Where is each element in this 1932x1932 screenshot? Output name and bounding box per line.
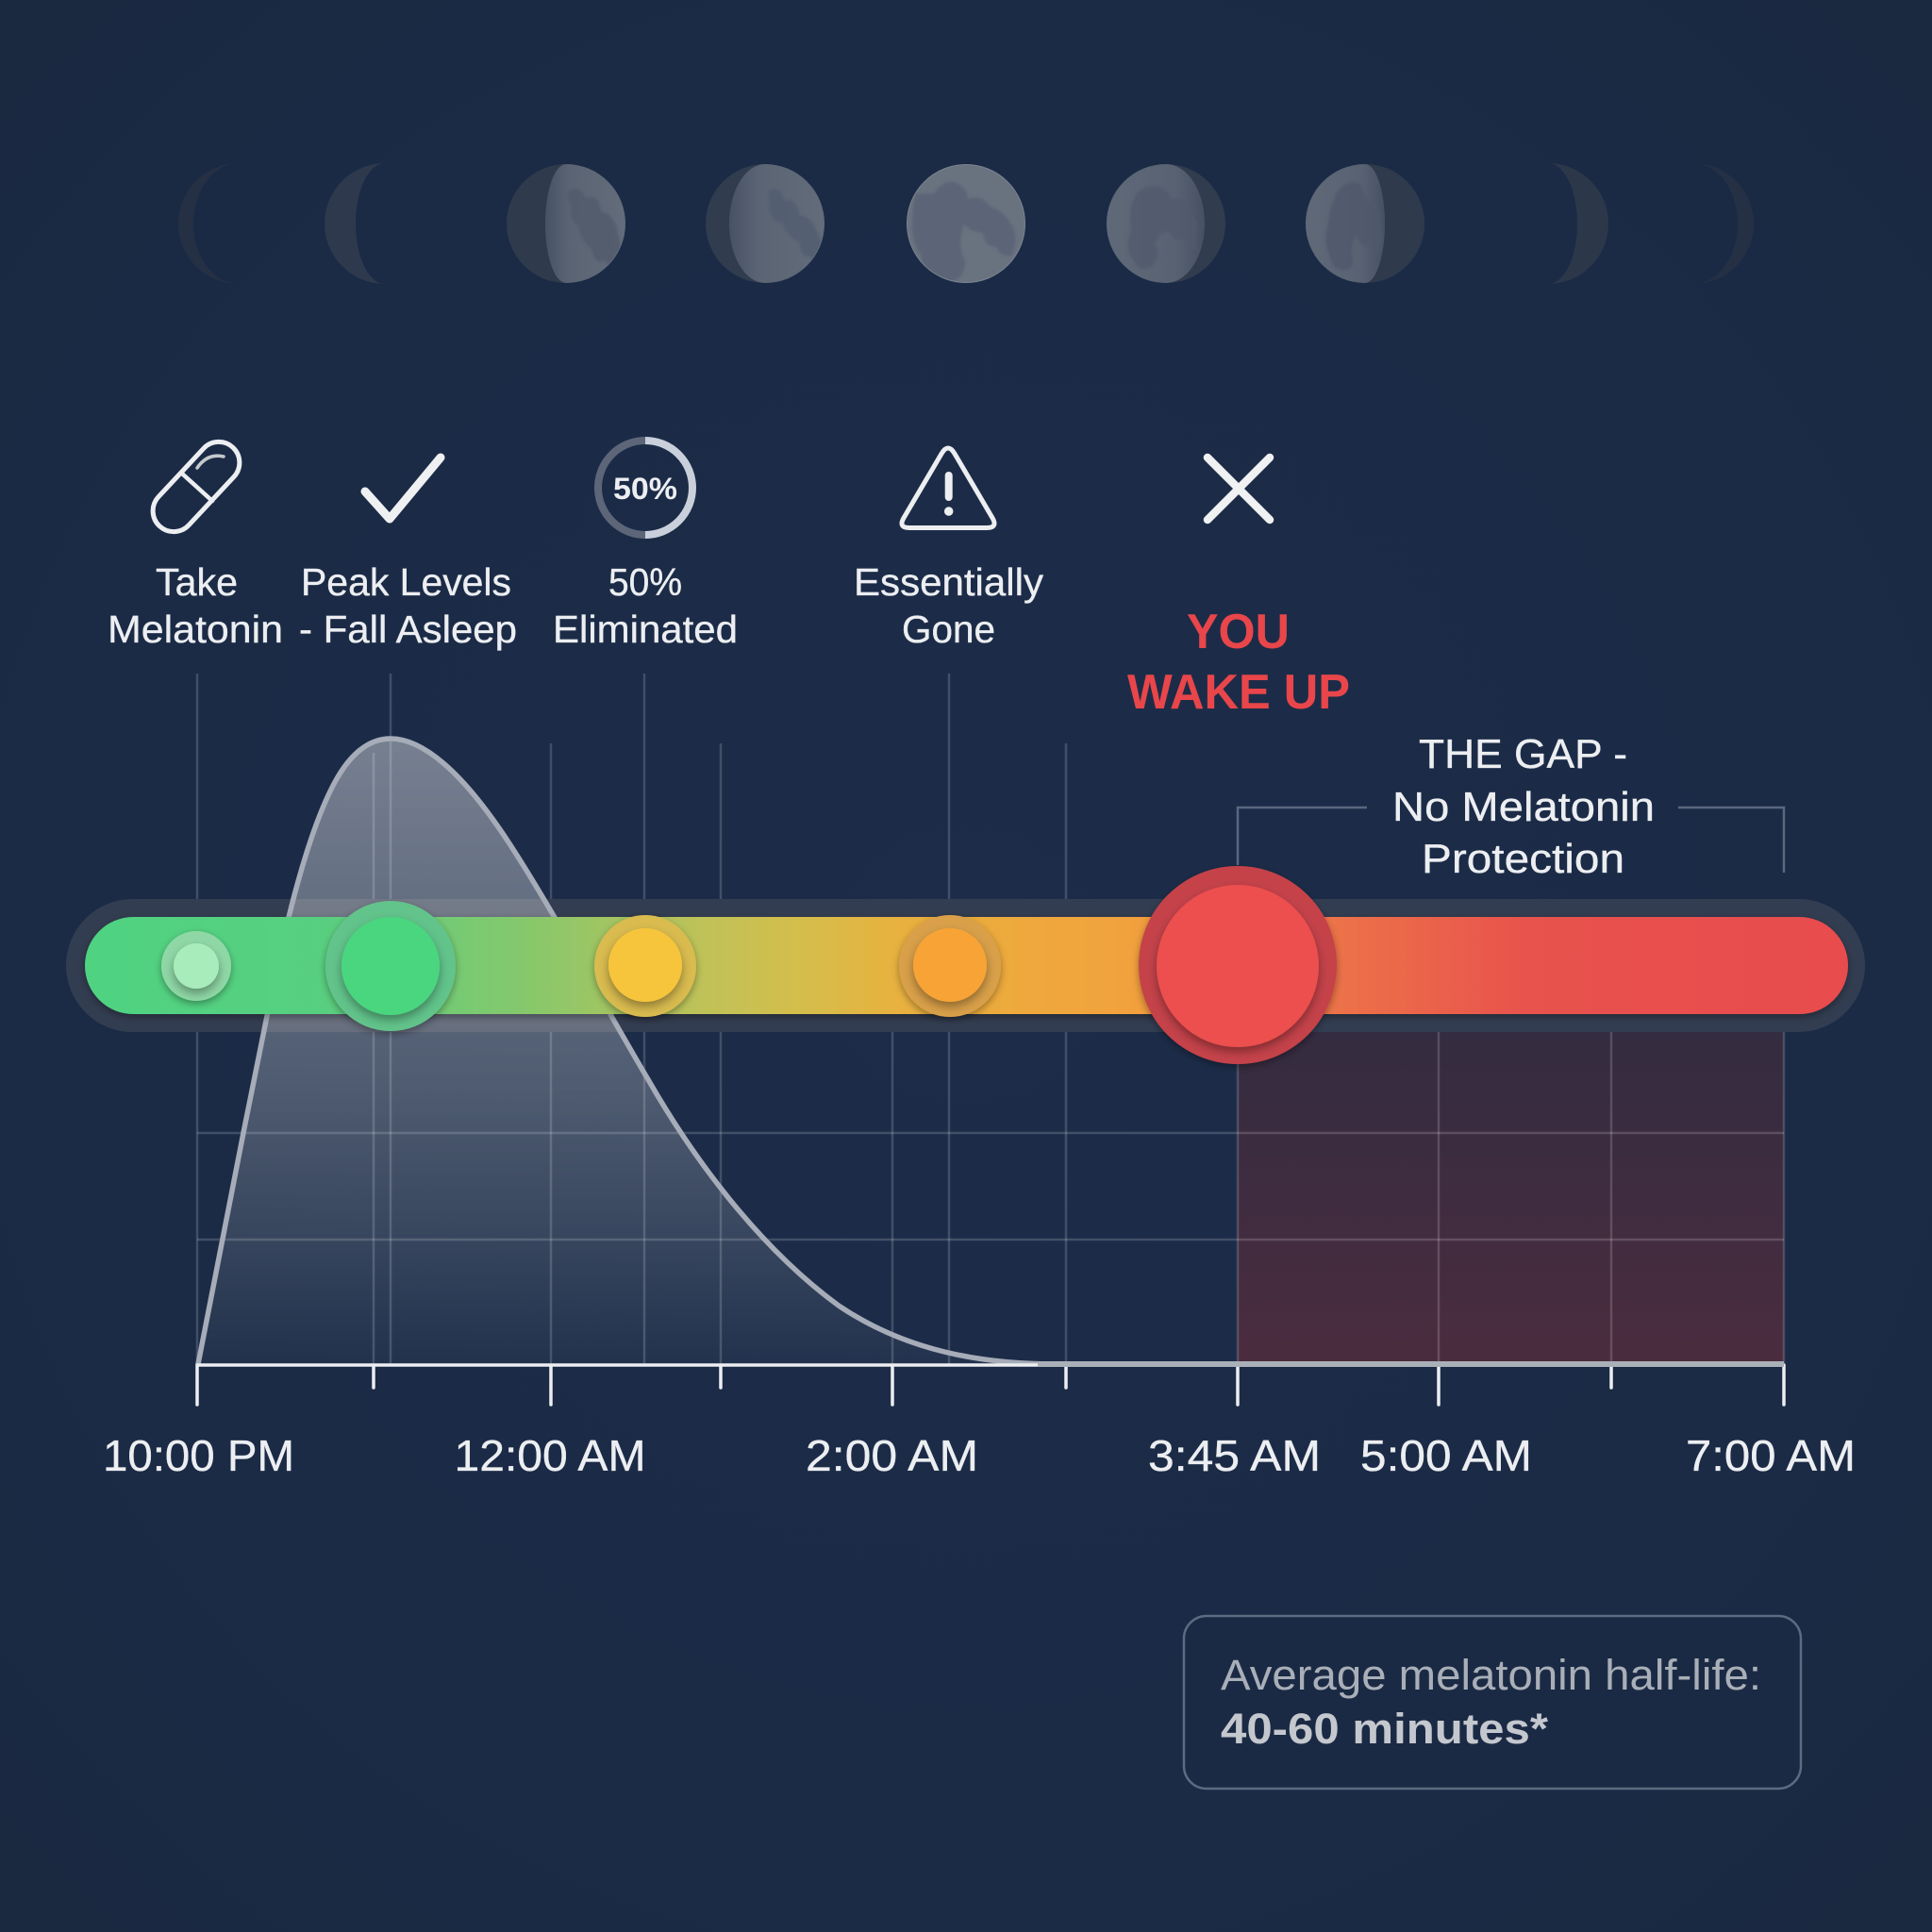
label: the gap: THE GAP - <box>1419 731 1627 777</box>
label: peak levels <box>299 560 517 651</box>
label: 50% eliminated: Eliminated <box>553 608 738 651</box>
label: take melatonin <box>108 560 283 651</box>
label: essentially gone: Gone <box>902 608 995 651</box>
time labels: 2:00 AM <box>806 1431 978 1480</box>
icon: 50% ring <box>598 441 692 535</box>
time labels: 7:00 AM <box>1686 1431 1856 1480</box>
chart grid lines <box>197 674 1784 1364</box>
label: 50% eliminated <box>553 560 738 651</box>
time labels <box>103 1431 1856 1480</box>
time labels: 12:00 AM <box>455 1431 645 1480</box>
marker: peak levels <box>325 901 456 1031</box>
callout: half-life: Average melatonin half-life: <box>1221 1651 1761 1699</box>
moon phases row <box>178 163 1754 284</box>
moon: thin waxing crescent <box>178 163 239 284</box>
gradient timeline bar <box>85 917 1848 1014</box>
marker: you wake up <box>1139 866 1337 1064</box>
label: take melatonin: Take <box>156 560 238 604</box>
label: you wake up <box>1127 605 1350 720</box>
icon: check mark <box>365 458 441 519</box>
moon: crescent <box>325 163 385 284</box>
marker: take melatonin <box>161 931 231 1001</box>
marker: essentially gone <box>899 915 1001 1017</box>
moon: waning phase two <box>1306 164 1424 283</box>
icon: cross <box>1208 458 1270 520</box>
label: peak levels: - Fall Asleep <box>299 608 517 651</box>
label: essentially gone <box>854 560 1043 651</box>
melatonin curve <box>198 739 1057 1364</box>
time labels: 5:00 AM <box>1360 1431 1532 1480</box>
label: 50% eliminated: 50% <box>608 560 682 604</box>
label: the gap <box>1392 731 1655 882</box>
moon: waxing phase two <box>706 164 824 283</box>
moon: thin waning crescent <box>1693 163 1754 284</box>
label: take melatonin: Melatonin <box>108 608 283 651</box>
label: you wake up: WAKE UP <box>1127 665 1350 720</box>
icon: warning triangle <box>902 448 994 528</box>
label: the gap: Protection <box>1422 836 1624 882</box>
moon: waning crescent <box>1548 163 1608 284</box>
callout: half-life: 40-60 minutes* <box>1221 1705 1549 1753</box>
moon: full <box>908 164 1024 283</box>
time labels: 10:00 PM <box>103 1431 294 1480</box>
label: peak levels: Peak Levels <box>301 560 511 604</box>
moon: waxing phase one <box>507 164 625 283</box>
marker: 50% eliminated <box>594 915 696 1017</box>
callout: half-life <box>1184 1616 1801 1789</box>
icon: capsule <box>144 433 248 541</box>
moon: waning phase one <box>1107 164 1225 283</box>
gap shaded region <box>1238 1032 1784 1364</box>
timeline track <box>66 899 1865 1032</box>
label: you wake up: YOU <box>1187 605 1290 659</box>
label: the gap: No Melatonin <box>1392 784 1655 830</box>
icon: 50% ring: 50% <box>613 472 677 506</box>
time axis <box>197 1364 1784 1405</box>
label: essentially gone: Essentially <box>854 560 1043 604</box>
gap bracket <box>1238 808 1784 873</box>
time labels: 3:45 AM <box>1148 1431 1321 1480</box>
